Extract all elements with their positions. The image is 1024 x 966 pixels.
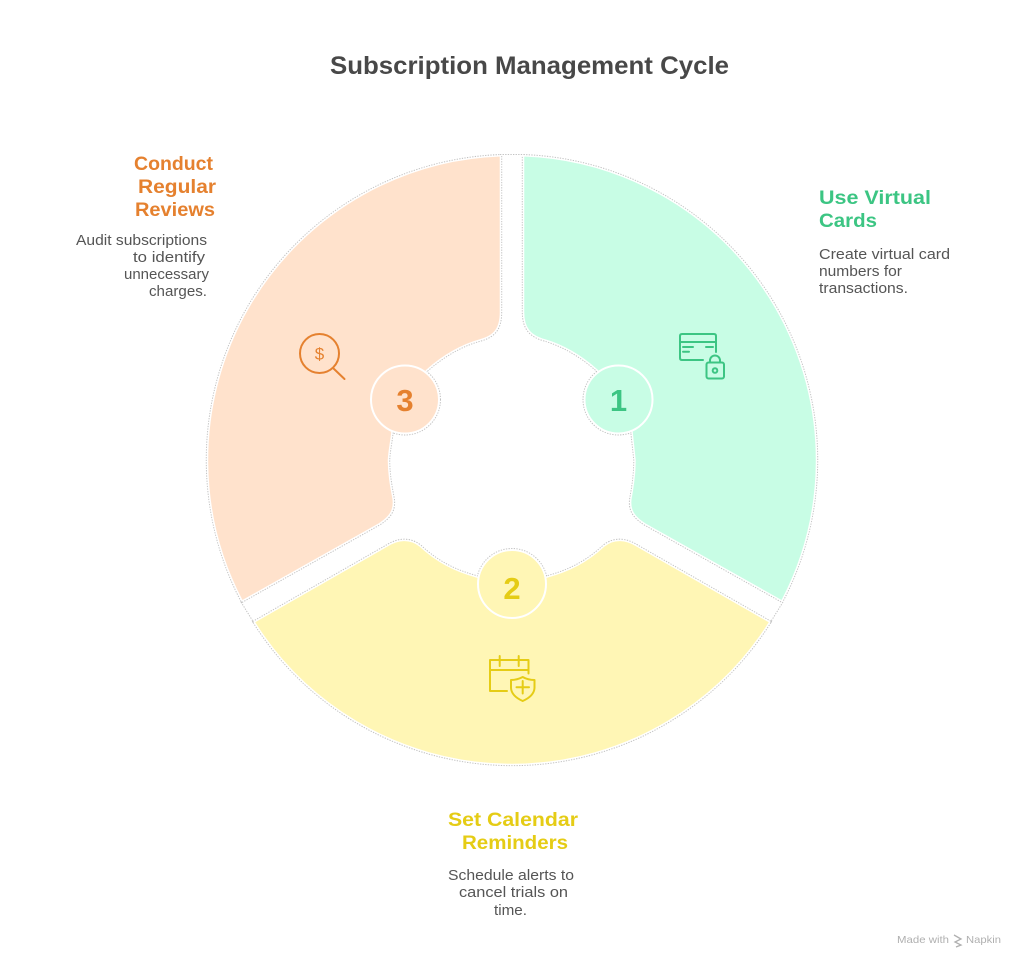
heading: use virtual cards: Cards	[819, 210, 877, 232]
number badge 3	[371, 366, 439, 434]
heading: use virtual cards: Use Virtual	[819, 187, 931, 209]
heading: set calendar reminders: Reminders	[462, 832, 568, 854]
segment: green	[524, 156, 817, 601]
text: set calendar reminders description: Schedule alerts to	[448, 868, 574, 884]
heading: set calendar reminders: Set Calendar	[448, 809, 578, 831]
text: set calendar reminders description: time.	[494, 903, 527, 919]
panel: step 3 conduct regular reviews	[76, 153, 500, 601]
number badge 1: 1	[610, 383, 627, 418]
icon: magnifier with dollar sign	[300, 334, 344, 379]
text: use virtual cards description	[819, 247, 950, 297]
heading: set calendar reminders	[448, 809, 578, 854]
heading: conduct regular reviews: Regular	[138, 176, 216, 198]
text: set calendar reminders description	[448, 868, 574, 919]
text: use virtual cards description: transactions.	[819, 281, 908, 297]
segment: yellow	[254, 540, 770, 764]
heading: use virtual cards	[819, 187, 931, 232]
number badge 1	[584, 366, 652, 434]
watermark: made with napkin: Made with	[897, 934, 949, 946]
text: use virtual cards description: numbers for	[819, 264, 902, 280]
panel: step 2 set calendar reminders	[254, 540, 770, 919]
text: conduct regular reviews description: to identify	[133, 250, 206, 266]
text: conduct regular reviews description: unnecessary	[124, 267, 210, 283]
text: conduct regular reviews description: charges.	[149, 284, 207, 300]
segment: orange	[207, 156, 501, 601]
heading: conduct regular reviews: Reviews	[135, 199, 215, 221]
heading: conduct regular reviews: Conduct	[134, 153, 213, 175]
watermark: made with napkin	[897, 934, 1001, 947]
number badge 2: 2	[503, 571, 521, 606]
watermark: made with napkin: Napkin	[966, 934, 1001, 946]
number badge 2	[478, 550, 546, 618]
icon: credit card with lock	[680, 334, 724, 378]
icon: magnifier with dollar sign: $	[315, 344, 325, 364]
number badge 3: 3	[396, 383, 414, 418]
icon: calendar with shield	[490, 656, 534, 701]
text: conduct regular reviews description: Audit subscriptions	[76, 233, 207, 249]
heading: conduct regular reviews	[134, 153, 216, 221]
title: Subscription Management Cycle	[330, 52, 729, 80]
panel: step 1 use virtual cards	[524, 156, 950, 601]
text: conduct regular reviews description	[76, 233, 210, 300]
text: use virtual cards description: Create virtual card	[819, 247, 950, 263]
text: set calendar reminders description: cancel trials on	[459, 885, 568, 901]
